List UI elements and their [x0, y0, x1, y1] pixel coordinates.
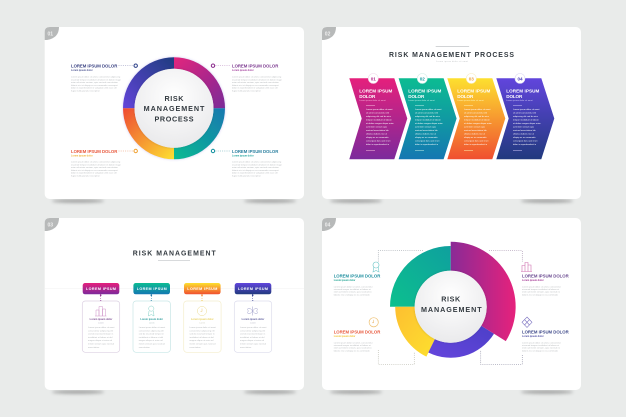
callout: bottom left with clock icon: eiusmod tempor incididunt ut labore et [334, 344, 371, 347]
callout: top left with medal icon: laboris nisi ut aliquip ex ea commodo [334, 293, 370, 296]
chevron 1: tempor incididunt ut labore [366, 118, 393, 122]
chevron 1: nostrud exercitation lab [366, 129, 389, 132]
chevron 4: sit amet consectetur elit [513, 112, 536, 114]
card 1: exercitation [88, 346, 100, 349]
dotted connectors [378, 251, 522, 364]
chevron 4: ad minim veniam quis [513, 126, 535, 128]
card 4: magna aliqua ut enim ad [240, 339, 265, 342]
heading: Lorem ipsum dolor sit amet [436, 60, 468, 63]
chevron 3: sit amet consectetur elit [464, 112, 487, 114]
chevron 1 [349, 74, 407, 159]
badge 01 [45, 27, 59, 40]
card 4: Lorem ipsum dolor sit amet [240, 326, 267, 329]
chevron 3: tempor incididunt ut labore [464, 118, 491, 122]
callout: top left: dolor in reprehenderit in voluptate velit esse cill [71, 87, 117, 90]
callout: top right with bars icon: Lorem ipsum dolor sit amet, consectetur [522, 285, 561, 288]
card 3: sed do eiusmod tempor in [189, 333, 215, 336]
callout: bottom right: LOREM IPSUM DOLOR [232, 149, 279, 154]
callout: bottom left with clock icon: enim ad minim veniam, quis nostrud ex [334, 347, 373, 350]
callout: bottom left with clock icon: Lorem ipsum dolor [334, 335, 355, 338]
card 1: LOREM IPSUM [86, 287, 116, 291]
panel: 03 risk management cards [45, 218, 304, 394]
card 1: Lorem ipsum dolor sit amet [88, 326, 115, 329]
chevron 2: dolor in reprehenderit in [415, 143, 439, 146]
chart centre label [415, 271, 487, 343]
card 4: exercitation [240, 346, 252, 349]
chevron 4: LOREM IPSUM [506, 88, 539, 94]
chevron 3: et dolore magna aliqua enim [464, 122, 492, 125]
card 1: sed do eiusmod tempor in [88, 333, 114, 336]
chevron 4: DOLOR [506, 94, 523, 99]
donut centre label: MANAGEMENT [144, 104, 205, 113]
callout: top right with bars icon [521, 262, 570, 296]
chevron 4: adipiscing elit sed do eius [513, 115, 539, 118]
chevron 1: ad minim veniam quis [366, 126, 388, 128]
callout: bottom left: dolor in reprehenderit in voluptate velit esse cill [71, 172, 117, 175]
chevron 3: Lorem ipsum dolor sit amet [457, 99, 484, 102]
card 3: minim veniam quis nostrud [189, 342, 216, 346]
callout: top right: fugiat nulla pariatur excepteur [232, 90, 261, 92]
callout: top left: Lorem ipsum dolor [71, 69, 93, 72]
chevron 4: 04 [517, 76, 523, 81]
panel: 04 radial chart [322, 218, 581, 394]
callout: top right with bars icon: eiusmod tempor incididunt ut labore et [522, 288, 559, 291]
chevron 4: Lorem ipsum dolor sit amet [506, 99, 533, 102]
chevron 2: et dolore magna aliqua enim [415, 122, 443, 125]
callout: top left: eiusmod tempor incididunt ut labore et dolore magn [71, 78, 122, 81]
donut centre label [134, 69, 214, 148]
chevron 4: aliquip ex ea commodo [513, 137, 536, 139]
chevron 2: 02 [420, 76, 425, 81]
callout: top left: fugiat nulla pariatur excepteur [71, 90, 100, 92]
badge 03: 03 [48, 222, 53, 228]
callout: top right with bars icon: laboris nisi ut aliquip ex ea commodo [522, 293, 559, 296]
callout: bottom left: enim ad minim veniam, quis nostrud exercitation [71, 166, 119, 169]
callout: top right: Lorem ipsum dolor sit amet, consectetur adipiscing [232, 76, 282, 78]
chevron 1: 01 [371, 76, 376, 81]
callout: top right: LOREM IPSUM DOLOR [232, 64, 279, 69]
chevron 4: Lorem ipsum dolor sit amet [513, 108, 540, 111]
donut centre label: PROCESS [154, 115, 194, 124]
card 4: sed do eiusmod tempor in [240, 333, 266, 336]
chevron 1: Lorem ipsum dolor sit amet [366, 108, 393, 111]
card 2: magna aliqua ut enim ad [139, 339, 163, 342]
chevron 1: adipiscing elit sed do eius [366, 115, 392, 118]
callout: top left with medal icon: enim ad minim veniam, quis nostrud ex [334, 291, 373, 294]
heading [133, 250, 216, 261]
chevron 2: Lorem ipsum dolor sit amet [408, 99, 435, 102]
chevron 3: Lorem ipsum dolor sit amet [464, 108, 491, 111]
card 2 [133, 283, 170, 352]
callout: top right with bars icon: Lorem ipsum dolor [522, 279, 544, 282]
callout: bottom right with diamond icon: LOREM IPSUM DOLOR [522, 329, 570, 334]
chevron 2: tempor incididunt ut labore [415, 118, 442, 122]
chevron 1: consequat duis aute irure [366, 140, 391, 142]
chevron 1: ullamco laboris nisi ut [366, 132, 387, 136]
chevron 3 [447, 74, 505, 159]
callout: bottom right: Lorem ipsum dolor [232, 154, 254, 158]
card 4 [234, 283, 272, 352]
chevron 4: et dolore magna aliqua enim [513, 122, 541, 125]
badge 02 [322, 27, 336, 40]
callout: top left with medal icon: Lorem ipsum dolor sit amet, consectetur [334, 285, 373, 288]
radial chart: four segments of different radii [390, 242, 516, 358]
callout: bottom left: Lorem ipsum dolor sit amet, consectetur adipiscing [71, 160, 121, 164]
callout: top right [211, 64, 283, 92]
heading [389, 46, 514, 63]
chevron 2: DOLOR [408, 94, 425, 99]
chevron 2 [399, 74, 457, 159]
callout: top left with medal icon [334, 262, 381, 296]
chevron 2: Lorem ipsum dolor sit amet [415, 108, 442, 111]
card 3: LOREM IPSUM [187, 287, 217, 291]
callout: bottom right: enim ad minim veniam, quis nostrud exercitation [232, 166, 280, 169]
heading: RISK MANAGEMENT PROCESS [389, 52, 514, 59]
card 2: consectetur adipiscing elit [139, 329, 164, 332]
card 2: LOREM IPSUM [137, 287, 167, 291]
card 1: minim veniam quis nostrud [88, 342, 115, 346]
chevron 3: ad minim veniam quis [464, 126, 486, 128]
chevron 1: et dolore magna aliqua enim [366, 122, 394, 125]
chevron 4: tempor incididunt ut labore [513, 118, 540, 122]
callout: bottom right with diamond icon: eiusmod tempor incididunt ut labore et [522, 344, 559, 347]
chevron 1: DOLOR [359, 94, 376, 99]
badge 04 [322, 218, 336, 231]
card 3: Lorem ipsum dolor [191, 318, 214, 321]
chevron 2: consequat duis aute irure [415, 140, 440, 142]
card 2: incididunt ut labore et dol [139, 336, 164, 339]
callout: bottom right: Lorem ipsum dolor sit amet, consectetur adipiscing [232, 160, 282, 164]
donut centre label: RISK [164, 94, 184, 103]
callout: top right with bars icon: LOREM IPSUM DOLOR [522, 273, 570, 278]
card 4: incididunt ut labore et dol [240, 336, 265, 339]
card 3: exercitation [189, 346, 201, 349]
chevron 1: sit amet consectetur elit [366, 112, 389, 114]
callout: bottom left [71, 149, 137, 178]
card 2: sed do eiusmod tempor in [139, 333, 165, 336]
callout: bottom left with clock icon: LOREM IPSUM DOLOR [334, 329, 381, 334]
chevron 2: adipiscing elit sed do eius [415, 115, 441, 118]
chevron 2: aliquip ex ea commodo [415, 137, 438, 139]
card 3: Lorem [199, 322, 205, 324]
card 3: Lorem ipsum dolor sit amet [189, 326, 216, 329]
callout: top right: Lorem ipsum dolor [232, 69, 254, 72]
chevron 3: 03 [469, 76, 474, 81]
chevron 3: LOREM IPSUM [457, 88, 490, 94]
callout: bottom right with diamond icon: enim ad minim veniam, quis nostrud ex [522, 347, 561, 350]
badge 01: 01 [48, 31, 53, 37]
card 3 [184, 283, 221, 352]
card 2: exercitation [139, 346, 151, 349]
callout: bottom right with diamond icon [522, 317, 570, 352]
card 2: Lorem [149, 322, 155, 324]
panel: 01 risk management process donut [45, 27, 304, 203]
callout: bottom left: fugiat nulla pariatur excepteur [71, 174, 100, 178]
chevron 2: nostrud exercitation lab [415, 129, 438, 132]
chevron 2: LOREM IPSUM [408, 88, 441, 94]
chevron 1: LOREM IPSUM [359, 88, 392, 94]
card 3: consectetur adipiscing elit [189, 329, 215, 332]
callout: bottom left: LOREM IPSUM DOLOR [71, 149, 118, 154]
chevron 3: nostrud exercitation lab [464, 129, 487, 132]
callout: bottom right with diamond icon: Lorem ipsum dolor [522, 335, 544, 338]
callout: top right with bars icon: enim ad minim veniam, quis nostrud ex [522, 291, 561, 294]
card 2: Lorem ipsum dolor [140, 318, 163, 321]
chevron 3: DOLOR [457, 94, 474, 99]
card 4: consectetur adipiscing elit [240, 329, 265, 332]
chevron 3: ullamco laboris nisi ut [464, 132, 485, 136]
card 4: Lorem [250, 322, 256, 324]
chart centre label: MANAGEMENT [421, 305, 482, 314]
chevron 3: dolor in reprehenderit in [464, 143, 488, 146]
callout: top left with medal icon: eiusmod tempor incididunt ut labore et [334, 288, 371, 291]
badge 03 [45, 218, 59, 231]
card 4: LOREM IPSUM [238, 287, 268, 291]
chevron 4: nostrud exercitation lab [513, 129, 536, 132]
card 1: consectetur adipiscing elit [88, 329, 113, 332]
card 4: minim veniam quis nostrud [240, 342, 267, 346]
chevron 3: consequat duis aute irure [464, 140, 489, 142]
callout: bottom left with clock icon [334, 318, 381, 352]
callout: bottom left: eiusmod tempor incididunt ut labore et dolore magn [71, 163, 122, 166]
callout: bottom left with clock icon: laboris nisi ut aliquip ex ea commodo [334, 349, 370, 352]
badge 02: 02 [325, 31, 331, 37]
callout: top left with medal icon: LOREM IPSUM DOLOR [334, 273, 381, 278]
card 1: incididunt ut labore et dol [88, 336, 113, 339]
callout: top right: dolor in reprehenderit in voluptate velit esse cill [232, 87, 278, 90]
card 1 [82, 283, 120, 352]
callout: bottom right with diamond icon: laboris nisi ut aliquip ex ea commodo [522, 349, 559, 352]
callout: bottom right with diamond icon: Lorem ipsum dolor sit amet, consectetur [522, 341, 561, 344]
callout: top right: eiusmod tempor incididunt ut labore et dolore magn [232, 78, 283, 81]
callout: bottom right: laboris nisi ut aliquip ex ea commodo consequat [232, 169, 279, 172]
callout: top right: enim ad minim veniam, quis nostrud exercitation [232, 81, 280, 84]
chevron 4: consequat duis aute irure [513, 140, 538, 142]
chevron 2: ullamco laboris nisi ut [415, 132, 436, 136]
card 4: Lorem ipsum dolor [242, 318, 264, 321]
chevron 4: dolor in reprehenderit in [513, 143, 537, 146]
card 2: minim veniam quis nostrud [139, 342, 166, 346]
callout: bottom left: laboris nisi ut aliquip ex ea commodo consequat [71, 169, 118, 172]
chevron 3: aliquip ex ea commodo [464, 137, 487, 139]
chart centre label: RISK [441, 295, 461, 304]
card 1: Lorem ipsum dolor [90, 318, 112, 321]
card 3: magna aliqua ut enim ad [189, 339, 214, 342]
callout: top left: Lorem ipsum dolor sit amet, consectetur adipiscing [71, 76, 121, 78]
chevron 4: ullamco laboris nisi ut [513, 132, 534, 136]
callout: bottom right: fugiat nulla pariatur excepteur [232, 174, 261, 178]
chevron 2: ad minim veniam quis [415, 126, 437, 128]
callout: top right: laboris nisi ut aliquip ex ea commodo consequat [232, 84, 279, 87]
chevron 1: Lorem ipsum dolor sit amet [359, 99, 386, 102]
card 1: magna aliqua ut enim ad [88, 339, 113, 342]
card 3: incididunt ut labore et dol [189, 336, 214, 339]
callout: bottom left with clock icon: Lorem ipsum dolor sit amet, consectetur [334, 341, 373, 344]
callout: top left [71, 64, 137, 92]
panel: 02 chevron process [322, 27, 581, 203]
callout: top left with medal icon: Lorem ipsum dolor [334, 279, 355, 282]
donut chart: four segments [123, 57, 225, 159]
callout: bottom right [211, 149, 283, 178]
callout: bottom right: eiusmod tempor incididunt ut labore et dolore magn [232, 163, 283, 166]
heading: RISK MANAGEMENT [133, 250, 216, 257]
callout: bottom left: Lorem ipsum dolor [71, 154, 93, 158]
callout: top left: enim ad minim veniam, quis nostrud exercitation [71, 81, 119, 84]
chevron 1: dolor in reprehenderit in [366, 143, 390, 146]
chevron 1: aliquip ex ea commodo [366, 137, 389, 139]
callout: bottom right: dolor in reprehenderit in voluptate velit esse cill [232, 172, 278, 175]
chevron 4 [496, 74, 554, 159]
callout: top left: LOREM IPSUM DOLOR [71, 64, 118, 69]
callout: top left: laboris nisi ut aliquip ex ea commodo consequat [71, 84, 118, 87]
card 2: Lorem ipsum dolor sit amet [139, 326, 165, 329]
card 1: Lorem [98, 322, 104, 324]
badge 04: 04 [325, 222, 331, 228]
chevron 3: adipiscing elit sed do eius [464, 115, 490, 118]
chevron 2: sit amet consectetur elit [415, 112, 438, 114]
